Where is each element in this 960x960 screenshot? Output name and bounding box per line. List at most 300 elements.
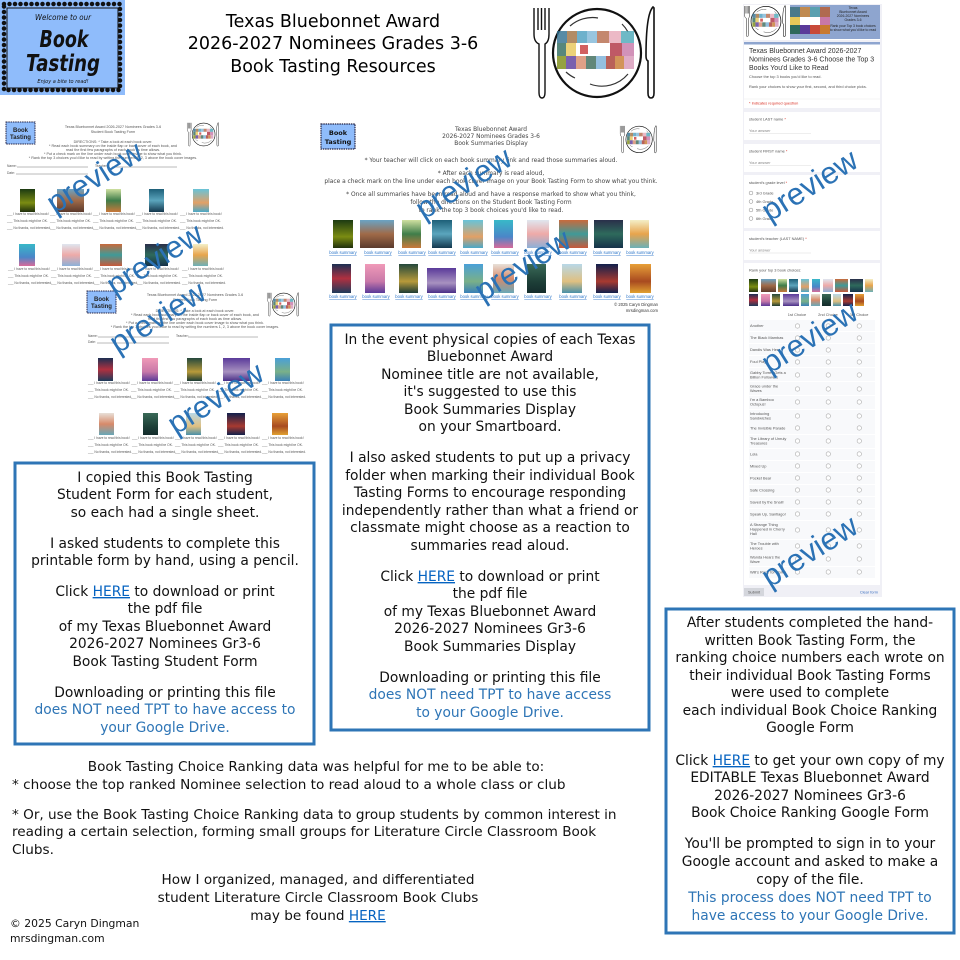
- row 1 responses: ___ This book might be OK.: [130, 388, 172, 392]
- ranking column headers: 3rd Choice: [850, 312, 868, 317]
- callout: book summaries display: summaries read aloud.: [411, 538, 569, 554]
- callout: google form: have access to your Google Drive.: [692, 908, 928, 924]
- ranking row titles: Dandis Was Here: [750, 347, 780, 352]
- callout: student form: Student Form for each student,: [57, 487, 273, 503]
- display copyright: mrsdingman.com: [626, 308, 659, 313]
- row 2 responses: ___ No thanks, not interested.: [181, 281, 226, 285]
- row 1 summary links: book summary: [524, 250, 553, 255]
- row 1 responses: ___ This book might be OK.: [217, 388, 259, 392]
- row 2 summary links: book summary: [329, 294, 358, 299]
- first name question: [744, 144, 880, 172]
- form title card: Choose the top 3 books you'd like to read.: [749, 74, 822, 79]
- row 2 responses: ___ No thanks, not interested.: [217, 450, 262, 454]
- logo: Book Tasting: Book: [40, 27, 90, 53]
- text block: literature circle link: [158, 872, 478, 924]
- row 1 responses: ___ No thanks, not interested.: [217, 395, 262, 399]
- text block: ranking data notes: * Or, use the Book Tasting Choice Ranking data to group students by common interest in: [12, 807, 616, 823]
- panel: second student form preview: [87, 291, 306, 454]
- text block: literature circle link: student Literature Circle Classroom Book Clubs: [158, 890, 478, 906]
- ranking row titles: Safe Crossing: [750, 488, 774, 492]
- ranking row titles: Happened in Cherry: [750, 526, 785, 532]
- ranking row titles: Billion Followers: [750, 374, 778, 380]
- row 1 responses: ___ I have to read this book!: [217, 381, 260, 385]
- mini logo: [87, 291, 116, 313]
- display heading: Book Summaries Display: [454, 141, 528, 147]
- logo: Book Tasting: [0, 0, 125, 95]
- row 2 responses: ___ This book might be OK.: [217, 443, 259, 447]
- ranking row titles: [750, 323, 787, 574]
- callout: google form: EDITABLE Texas Bluebonnet Award: [690, 770, 930, 786]
- callout: student form: your Google Drive.: [100, 720, 230, 736]
- callout: book summaries display: Nominee title are not available,: [381, 367, 599, 383]
- callout: google form: Book Choice Ranking Google Form: [691, 805, 929, 821]
- display heading: Texas Bluebonnet Award: [454, 127, 527, 133]
- preview watermarks: [40, 134, 865, 594]
- callout: book summaries display: on your Smartboard.: [419, 419, 561, 435]
- row 1 covers: [98, 358, 290, 381]
- last name question: student LAST name *: [749, 116, 786, 122]
- row 2 responses: [87, 436, 306, 454]
- ranking row titles: Will's Race for Home: [750, 570, 786, 574]
- callout: google form: ranking choice numbers each wrote on: [675, 650, 945, 666]
- ranking row titles: I'm a Bamboo: [750, 397, 774, 402]
- row 1 responses: ___ No thanks, not interested.: [6, 226, 51, 230]
- mini logo: Tasting: [10, 135, 31, 141]
- row 2 responses: ___ This book might be OK.: [131, 443, 173, 447]
- last name question: Your answer: [749, 128, 771, 133]
- ranking row titles: Mixed Up: [750, 464, 766, 468]
- logo: Book Tasting: Enjoy a bite to read!: [37, 79, 89, 85]
- mini logo: Tasting: [325, 138, 352, 146]
- row 1 responses: ___ I have to read this book!: [135, 212, 178, 216]
- submit and clear form: [744, 588, 878, 596]
- callout: google form: 2026-2027 Nominees Gr3-6: [714, 788, 906, 804]
- teacher question: Your answer: [749, 248, 771, 252]
- ranking row titles: A Strange Thing: [750, 522, 778, 527]
- copyright: © 2025 Caryn Dingman: [10, 917, 139, 930]
- ranking row titles: Octopus!: [750, 402, 766, 406]
- display instructions: [324, 158, 658, 214]
- mini logo: Book: [13, 128, 29, 134]
- display copyright: © 2025 Caryn Dingman: [614, 302, 659, 307]
- row 1 responses: ___ No thanks, not interested.: [135, 226, 180, 230]
- row 1 book covers: [333, 220, 649, 248]
- row 1 responses: ___ I have to read this book!: [87, 381, 130, 385]
- text block: ranking data notes: reading a certain selection, forming small groups for Literature Circle Classroom Book: [12, 824, 596, 840]
- teacher question: [744, 231, 880, 260]
- row 2 responses: ___ No thanks, not interested.: [136, 281, 181, 285]
- panel: student form preview: [6, 122, 226, 285]
- display instructions: follow the directions on the Student Book Tasting Form: [410, 200, 572, 206]
- callout: book summaries display: to your Google Drive.: [416, 705, 564, 721]
- row 1 responses: ___ I have to read this book!: [92, 212, 135, 216]
- callout: google form: copy of the file.: [756, 872, 864, 888]
- mini plate: [267, 293, 298, 316]
- row 1 covers: [20, 189, 209, 212]
- form heading and directions: read the first few paragraphs of each book as time allows.: [148, 317, 242, 321]
- display copyright: [614, 302, 659, 313]
- row 2 responses: ___ This book might be OK.: [181, 274, 223, 278]
- text block: ranking data notes: Book Tasting Choice Ranking data was helpful for me to be able to:: [88, 759, 544, 775]
- preview watermarks: preview: [755, 294, 865, 380]
- panel: book summaries display preview: [321, 124, 659, 313]
- row 1 summary links: book summary: [398, 250, 427, 255]
- submit and clear form: Submit: [748, 590, 761, 594]
- row 2 responses: ___ I have to read this book!: [136, 267, 179, 271]
- form heading and directions: [111, 293, 279, 329]
- callout: google form: each individual Book Choice Ranking: [683, 703, 937, 719]
- row 2 responses: ___ No thanks, not interested.: [93, 281, 138, 285]
- callout: student form: printable form by hand, using a pencil.: [31, 553, 299, 569]
- row 1 responses: ___ I have to read this book!: [49, 212, 92, 216]
- display instructions: * After each summary is read aloud,: [438, 171, 544, 177]
- form heading and directions: * Rank the top 3 choices you'd like to read by writing the numbers 1, 2, 3 above the book cover images.: [29, 156, 197, 160]
- mini logo: Book: [329, 129, 348, 137]
- row 2 responses: ___ This book might be OK.: [93, 274, 135, 278]
- row 1 responses: ___ This book might be OK.: [135, 219, 177, 223]
- form header image: to show what you'd like to read: [830, 28, 876, 32]
- row 1 summary links: book summary: [460, 250, 489, 255]
- callout: google form: written Book Tasting Form, the: [704, 633, 916, 649]
- display heading: 2026-2027 Nominees Grades 3-6: [442, 134, 540, 140]
- text block: ranking data notes: [12, 759, 616, 858]
- form header image: Bluebonnet Award: [839, 10, 867, 14]
- callout: google form: You'll be prompted to sign in to your: [684, 836, 936, 852]
- callout: book summaries display: I also asked students to put up a privacy: [350, 450, 630, 466]
- row 2 summary links: book summary: [428, 294, 457, 299]
- row 2 covers: [99, 413, 288, 435]
- mini logo: [6, 122, 35, 144]
- form heading and directions: DIRECTIONS: * Take a look at each book cover.: [156, 309, 234, 313]
- ranking row titles: Foul Play: [750, 359, 766, 364]
- row 1 summary links: book summary: [559, 250, 588, 255]
- grade level question: 3rd Grade: [756, 190, 774, 196]
- form heading and directions: [29, 125, 197, 160]
- form title card: Texas Bluebonnet Award 2026-2027: [749, 48, 861, 55]
- ranking row titles: Grace under the: [750, 384, 778, 388]
- preview watermarks: preview: [100, 216, 210, 302]
- form title card: Rank your choices to show your first, second, and third choice picks.: [749, 84, 867, 89]
- copyright: mrsdingman.com: [10, 932, 105, 945]
- row 2 responses: ___ I have to read this book!: [181, 267, 224, 271]
- grade level question: student's grade level *: [749, 180, 788, 185]
- row 2 responses: [7, 267, 226, 285]
- submit and clear form: Clear form: [860, 590, 878, 594]
- form header image: Grades 3-6: [845, 18, 862, 22]
- mini plate: [620, 126, 656, 153]
- name and date lines: [7, 164, 177, 175]
- row 1 responses: [6, 212, 224, 230]
- display instructions: * Your teacher will click on each book summary link and read those summaries aloud.: [365, 158, 618, 164]
- callout: google form: [666, 609, 954, 933]
- ranking row titles: Introducing: [750, 411, 769, 416]
- form heading and directions: Student Book Tasting Form: [91, 130, 135, 134]
- ranking covers: [749, 279, 873, 306]
- grade level question: [744, 175, 880, 228]
- row 2 responses: ___ This book might be OK.: [174, 443, 216, 447]
- ranking row titles: Pocket Bear: [750, 476, 772, 480]
- row 1 responses: ___ No thanks, not interested.: [130, 395, 175, 399]
- ranking row titles: Wave: [750, 559, 760, 564]
- ranking row titles: The Library of Unruly: [750, 436, 786, 441]
- callout: google form: After students completed the hand-: [687, 615, 933, 631]
- preview watermarks: preview: [755, 508, 865, 594]
- callout: book summaries display: 2026-2027 Nominees Gr3-6: [394, 621, 586, 637]
- form title card: Books You'd Like to Read: [749, 65, 829, 72]
- callout: book summaries display: the pdf file: [453, 586, 527, 602]
- grade level question: 6th Grade: [756, 216, 773, 221]
- icon: dinner plate with fork and knife: [534, 7, 654, 98]
- callout: student form: so each had a single sheet.: [71, 505, 259, 521]
- row 1 responses: ___ I have to read this book!: [173, 381, 216, 385]
- name and date lines: Name:: [88, 334, 98, 338]
- name and date lines: Teacher:: [176, 334, 189, 338]
- callout: student form: 2026-2027 Nominees Gr3-6: [69, 636, 261, 652]
- ranking row titles: Treasures: [750, 440, 767, 446]
- form title card: Nominees Grades 3-6 Choose the Top 3: [749, 56, 874, 64]
- row 2 summary links: book summary: [559, 294, 588, 299]
- preview watermarks: preview: [409, 140, 519, 226]
- mini logo: Tasting: [91, 304, 112, 310]
- callout: book summaries display: of my Texas Bluebonnet Award: [384, 604, 596, 620]
- row 2 responses: ___ This book might be OK.: [87, 443, 129, 447]
- ranking column headers: [788, 312, 868, 317]
- form heading and directions: Texas Bluebonnet Award 2026-2027 Nominees Grades 3-6: [65, 125, 161, 129]
- row 2 responses: ___ No thanks, not interested.: [174, 450, 219, 454]
- ranking row titles: Lola: [750, 452, 758, 456]
- ranking question card: Rank your top 3 book choices:: [749, 268, 801, 272]
- callout: google form: their individual Book Tasting Forms: [689, 668, 931, 684]
- callout: book summaries display: Bluebonnet Award: [427, 349, 553, 365]
- display instructions: * Once all summaries have been read aloud and have a response marked to show what you think,: [346, 192, 636, 198]
- row 2 responses: ___ I have to read this book!: [261, 436, 304, 440]
- form header image: Texas: [849, 6, 858, 10]
- callout: student form: [15, 463, 314, 744]
- row 1 responses: ___ No thanks, not interested.: [92, 226, 137, 230]
- row 2 summary links: book summary: [491, 294, 520, 299]
- row 2 summary links: book summary: [524, 294, 553, 299]
- name and date lines: [88, 334, 258, 344]
- title: Texas Bluebonnet Award: [225, 12, 440, 32]
- row 2 covers: [19, 244, 208, 266]
- row 1 summary links: book summary: [364, 250, 393, 255]
- title: 2026-2027 Nominees Grades 3-6: [188, 34, 478, 54]
- ranking row titles: Heroes: [750, 546, 763, 550]
- callout: book summaries display: does NOT need TPT to have access: [369, 687, 611, 703]
- row 1 responses: ___ This book might be OK.: [6, 219, 48, 223]
- display heading: [442, 127, 540, 147]
- ranking row titles: Sandwiches: [750, 416, 771, 420]
- callout: google form: This process does NOT need TPT to: [687, 890, 932, 906]
- row 1 responses: ___ No thanks, not interested.: [261, 395, 306, 399]
- name and date lines: Date:: [7, 171, 15, 175]
- row 2 responses: ___ This book might be OK.: [261, 443, 303, 447]
- row 2 responses: ___ I have to read this book!: [131, 436, 174, 440]
- preview watermarks: preview: [755, 142, 865, 228]
- row 1 responses: ___ This book might be OK.: [49, 219, 91, 223]
- ranking row titles: Saved by the Snail!: [750, 500, 784, 504]
- callout: book summaries display: classmate might choose as a reaction to: [350, 520, 630, 536]
- preview watermarks: preview: [161, 355, 271, 441]
- callout: book summaries display: Downloading or printing this file: [379, 670, 601, 686]
- callout: student form: I copied this Book Tasting: [77, 470, 253, 486]
- form heading and directions: * Read each book summary on the inside flap or back cover of each book, and: [49, 144, 177, 148]
- row 2 summary links: book summary: [395, 294, 424, 299]
- row 1 responses: ___ No thanks, not interested.: [49, 226, 94, 230]
- row 1 summary links: book summary: [593, 250, 622, 255]
- ranking row titles: Speak Up, Santiago!: [750, 512, 786, 516]
- callout: student form: I asked students to complete this: [50, 536, 280, 552]
- row 1 responses: ___ No thanks, not interested.: [179, 226, 224, 230]
- text block: literature circle link: may be found HERE: [250, 908, 386, 924]
- row 1 summary links: book summary: [491, 250, 520, 255]
- row 2 responses: ___ No thanks, not interested.: [87, 450, 132, 454]
- row 1 summary links: [329, 250, 655, 255]
- row 1 responses: ___ This book might be OK.: [179, 219, 221, 223]
- ranking row titles: Gabby Torres Gets a: [750, 370, 787, 375]
- row 2 responses: ___ I have to read this book!: [7, 267, 50, 271]
- callout: book summaries display: In the event physical copies of each Texas: [344, 332, 636, 348]
- ranking column headers: 1st Choice: [788, 312, 806, 317]
- row 1 summary links: book summary: [329, 250, 358, 255]
- row 2 responses: ___ No thanks, not interested.: [261, 450, 306, 454]
- callout: student form: Click HERE to download or print: [55, 584, 275, 600]
- row 2 responses: ___ I have to read this book!: [87, 436, 130, 440]
- callout: student form: does NOT need TPT to have access to: [35, 702, 295, 718]
- title: [188, 12, 478, 77]
- row 1 responses: ___ This book might be OK.: [87, 388, 129, 392]
- form heading and directions: * Read each book summary on the inside flap or back cover of each book, and: [131, 313, 259, 317]
- form header image: [744, 5, 880, 40]
- ranking column headers: 2nd Choice: [818, 312, 838, 317]
- callout: google form: Google account and asked to make a: [682, 854, 938, 870]
- logo: Book Tasting: Tasting: [26, 51, 100, 77]
- form header image: Rank your Top 3 book choices: [830, 24, 876, 28]
- row 2 summary links: book summary: [460, 294, 489, 299]
- row 2 responses: ___ This book might be OK.: [50, 274, 92, 278]
- row 1 summary links: book summary: [428, 250, 457, 255]
- row 1 summary links: book summary: [626, 250, 655, 255]
- callout: google form: Click HERE to get your own copy of my: [675, 753, 945, 769]
- form background: [743, 4, 882, 597]
- text block: literature circle link: How I organized, managed, and differentiated: [162, 872, 474, 888]
- callout: book summaries display: Book Summaries Display: [404, 402, 576, 418]
- callout: book summaries display: independently rather than what a friend or: [342, 503, 638, 519]
- name and date lines: Teacher:: [95, 164, 108, 168]
- row 2 summary links: book summary: [362, 294, 391, 299]
- row 2 responses: ___ I have to read this book!: [174, 436, 217, 440]
- mini plate: [187, 123, 218, 146]
- panel: google form preview: [743, 4, 882, 597]
- ranking row titles: Another: [750, 323, 764, 328]
- row 1 responses: ___ I have to read this book!: [261, 381, 304, 385]
- preview watermarks: preview: [40, 134, 150, 220]
- row 1 responses: ___ No thanks, not interested.: [87, 395, 132, 399]
- ranking row titles: The Invisible Parade: [750, 426, 785, 430]
- form title card: [744, 42, 880, 108]
- ranking row titles: The Trouble with: [750, 541, 779, 546]
- row 2 responses: ___ This book might be OK.: [136, 274, 178, 278]
- form header image: 2026-2027 Nominees: [837, 14, 870, 18]
- row 2 book covers: [332, 264, 651, 293]
- form heading and directions: * Put a check mark on the line under each book cover image to show what you think.: [44, 152, 182, 156]
- callout: book summaries display: Book Summaries Display: [404, 639, 576, 655]
- form title card: * Indicates required question: [749, 100, 798, 106]
- form heading and directions: DIRECTIONS: * Take a look at each book cover.: [74, 140, 152, 144]
- callout: student form: of my Texas Bluebonnet Award: [59, 619, 271, 635]
- ranking row titles: Hall: [750, 531, 757, 536]
- row 2 responses: ___ No thanks, not interested.: [131, 450, 176, 454]
- ranking row titles: Waves: [750, 388, 762, 393]
- row 1 responses: ___ This book might be OK.: [261, 388, 303, 392]
- callout: student form: Downloading or printing this file: [54, 685, 276, 701]
- row 1 responses: ___ No thanks, not interested.: [173, 395, 218, 399]
- name and date lines: Name:: [7, 164, 17, 168]
- form heading and directions: Texas Bluebonnet Award 2026-2027 Nominees Grades 3-6: [147, 293, 243, 297]
- form heading and directions: Student Book Tasting Form: [173, 298, 217, 302]
- callout: google form: were used to complete: [731, 685, 889, 701]
- row 2 summary links: book summary: [626, 294, 655, 299]
- row 2 responses: ___ No thanks, not interested.: [7, 281, 52, 285]
- form heading and directions: * Rank the top 3 choices you'd like to read by writing the numbers 1, 2, 3 above the book cover images.: [111, 325, 279, 329]
- row 2 responses: ___ I have to read this book!: [217, 436, 260, 440]
- ranking row titles: Wanda Hears the: [750, 554, 780, 560]
- callout: student form: the pdf file: [128, 601, 202, 617]
- row 2 summary links: book summary: [593, 294, 622, 299]
- row 2 summary links: [329, 294, 655, 299]
- display instructions: to rank the top 3 book choices you'd like to read.: [419, 208, 563, 214]
- ranking radio buttons: [795, 324, 862, 574]
- grade level question: 5th Grade: [756, 208, 773, 212]
- text block: ranking data notes: * choose the top ranked Nominee selection to read aloud to a whole class or club: [12, 777, 565, 793]
- row 2 responses: ___ I have to read this book!: [93, 267, 136, 271]
- form heading and directions: * Put a check mark on the line under each book cover image to show what you think.: [126, 321, 264, 325]
- row 2 responses: ___ This book might be OK.: [7, 274, 49, 278]
- mini logo: [321, 124, 355, 149]
- row 2 responses: ___ I have to read this book!: [50, 267, 93, 271]
- first name question: Your answer: [749, 160, 771, 165]
- grade level question: 4th Grade: [756, 199, 773, 204]
- mini logo: Book: [94, 297, 110, 303]
- row 1 responses: ___ I have to read this book!: [179, 212, 222, 216]
- preview watermarks: preview: [468, 222, 578, 308]
- row 1 responses: ___ I have to read this book!: [130, 381, 173, 385]
- ranking question card: [744, 263, 880, 585]
- form heading and directions: read the first few paragraphs of each book as time allows.: [66, 148, 160, 152]
- first name question: student FIRST name *: [749, 148, 788, 154]
- ranking row stripes: [749, 320, 875, 578]
- callout: student form: Book Tasting Student Form: [72, 654, 258, 670]
- callout: book summaries display: Tasting Forms to encourage responding: [353, 485, 626, 501]
- preview watermarks: preview: [103, 274, 213, 360]
- ranking row titles: The Black Mambas: [750, 335, 783, 340]
- display instructions: place a check mark on the line under each book cover image on your Book Tasting Form to show what you think.: [324, 179, 658, 185]
- last name question: [744, 112, 880, 140]
- row 1 responses: ___ I have to read this book!: [6, 212, 49, 216]
- name and date lines: Date:: [88, 340, 96, 344]
- teacher question: student's teacher (LAST NAME) *: [749, 236, 807, 241]
- callout: book summaries display: it's suggested to use this: [404, 384, 576, 400]
- row 1 responses: [87, 381, 306, 399]
- row 1 responses: ___ This book might be OK.: [92, 219, 134, 223]
- logo: Book Tasting: Welcome to our: [35, 13, 92, 22]
- callout: google form: Google Form: [766, 720, 854, 736]
- row 2 responses: ___ No thanks, not interested.: [50, 281, 95, 285]
- text block: ranking data notes: Clubs.: [12, 842, 54, 858]
- copyright: [10, 917, 139, 945]
- callout: book summaries display: Click HERE to download or print: [380, 569, 600, 585]
- row 1 responses: ___ This book might be OK.: [173, 388, 215, 392]
